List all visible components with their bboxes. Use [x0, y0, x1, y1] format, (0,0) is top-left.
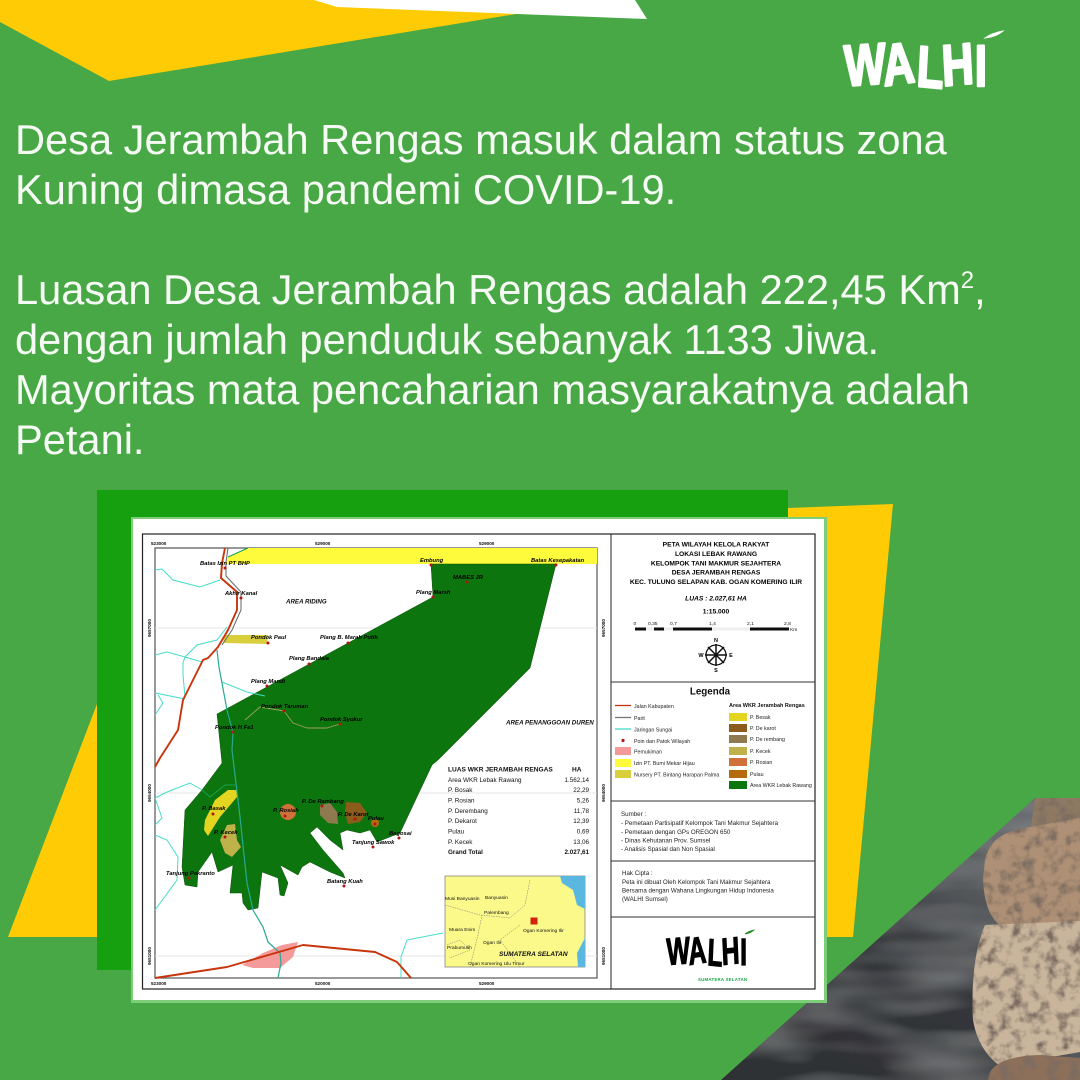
coordinate tick labels: 9654000: [147, 784, 152, 802]
area table: Pulau: [448, 828, 465, 836]
legend: Legenda: [690, 686, 731, 698]
area table: Grand Total: [448, 849, 483, 856]
map place labels: Bagosai: [389, 831, 412, 837]
legend: Jalan Kabupaten: [634, 704, 674, 710]
area table: P. Kecek: [448, 839, 473, 846]
heading text block: Luasan Desa Jerambah Rengas adalah 222,45 Km: [15, 266, 961, 313]
area table: P. Rosian: [448, 798, 475, 804]
map place labels: Pondok H Fe1: [215, 725, 254, 731]
top white banner shape: [314, 0, 647, 19]
heading text block: Kuning dimasa pandemi COVID-19.: [15, 166, 676, 213]
legend: Nursery PT. Bintang Harapan Palma: [634, 772, 719, 778]
heading text block: Mayoritas mata pencaharian masyarakatnya adalah: [15, 366, 970, 413]
coordinate tick labels: 523000: [151, 981, 167, 986]
area table: P. Derembang: [448, 808, 488, 815]
legend: Area WKR Jerambah Rengas: [729, 703, 805, 709]
area table: P. Dekarot: [448, 818, 477, 825]
heading text block: Petani.: [15, 416, 144, 463]
coordinate tick labels: 523000: [151, 541, 167, 546]
map place labels: Tanjung Sawok: [352, 840, 395, 846]
map title block: [630, 542, 802, 616]
rivers: [155, 548, 443, 978]
yellow concession strip: [226, 548, 597, 564]
WALHI logo: WALHI: [842, 31, 987, 101]
map place labels: Pondok Taruman: [261, 704, 309, 710]
legend: P. Kecek: [750, 749, 771, 755]
dark green backing panel: [97, 490, 788, 970]
map frame: [142, 534, 815, 989]
map title block: DESA JERAMBAH RENGAS: [672, 570, 761, 576]
compass rose: [698, 638, 733, 674]
coordinate tick labels: 9651000: [147, 947, 152, 965]
scale bar: 2,1: [747, 621, 754, 627]
map place labels: P. Rosiah: [273, 808, 299, 814]
map title block: KELOMPOK TANI MAKMUR SEJAHTERA: [651, 560, 781, 568]
map place labels: Pondok Syukur: [320, 717, 363, 723]
copyright text: Peta ini dibuat Oleh Kelompok Tani Makmur Sejahtera: [622, 879, 771, 886]
coordinate tick labels: [147, 541, 606, 986]
map place labels: P. Kecek: [214, 830, 238, 836]
scale bar: [634, 621, 797, 633]
coordinate tick labels: 9657000: [601, 619, 606, 637]
sources text: - Dinas Kehutanan Prov. Sumsel: [621, 838, 710, 844]
map place labels: Pulau: [368, 816, 384, 822]
map place labels: Embung: [420, 558, 444, 564]
heading text block: dengan jumlah penduduk sebanyak 1133 Jiwa.: [15, 316, 879, 363]
coordinate tick labels: 9654000: [601, 784, 606, 802]
legend: Area WKR Lebak Rawang: [750, 783, 812, 789]
scale bar: 2,8: [784, 621, 791, 627]
map title block: KEC. TULUNG SELAPAN KAB. OGAN KOMERING ILIR: [630, 579, 802, 586]
map title block: LUAS : 2.027,61 HA: [685, 596, 747, 602]
map place labels: Batas Izin PT BHP: [200, 561, 250, 567]
sources text: Sumber :: [621, 811, 646, 818]
heading text block: Desa Jerambah Rengas masuk dalam status zona: [15, 116, 948, 163]
map place labels: Plang B. Marah Putih: [320, 635, 378, 641]
map place labels: Plang Marsh: [416, 590, 451, 596]
inset location map: Ogan Ilir: [483, 940, 502, 946]
coordinate tick labels: 529000: [479, 981, 495, 986]
map place labels: MABES JR: [453, 575, 484, 581]
copyright text: (WALHI Sumsel): [622, 896, 668, 903]
area table: 2.027,61: [564, 849, 589, 856]
map place labels: Tanjung Pakranto: [166, 871, 215, 877]
scale bar: 0,7: [670, 621, 677, 627]
legend: P. De rembang: [750, 737, 785, 743]
legend: Jaringan Sungai: [634, 728, 672, 734]
map place labels: P. De Karot: [338, 812, 370, 818]
map title block: LOKASI LEBAK RAWANG: [675, 551, 757, 558]
inset location map: Musi Banyuasin: [445, 896, 480, 902]
area table: LUAS WKR JERAMBAH RENGAS: [448, 766, 553, 774]
inset location map: Palembang: [484, 910, 509, 916]
area table: Area WKR Lebak Rawang: [448, 777, 522, 784]
settlement area: [242, 942, 298, 968]
legend: Parit: [634, 716, 645, 722]
map title block: 1:15.000: [703, 608, 729, 616]
area table: 11,78: [574, 808, 589, 815]
compass rose: N: [714, 638, 718, 644]
legend: Pemukiman: [634, 750, 662, 756]
legend: P. Besak: [750, 715, 771, 721]
heading text block: ,: [974, 266, 986, 313]
inset location map: [445, 876, 585, 967]
map place labels: Akhir Kanal: [224, 591, 258, 597]
coordinate tick labels: 9657000: [147, 619, 152, 637]
scale bar: 1,4: [709, 621, 716, 627]
map card: [131, 517, 827, 1003]
map place labels: AREA PENANGGOAN DUREN: [505, 720, 594, 726]
community managed area polygon: [182, 564, 556, 910]
copyright text: Bersama dengan Wahana Lingkungan Hidup Indonesia: [622, 888, 774, 894]
inset location map: Ogan Komering Ulu Timur: [468, 961, 525, 967]
sub-area patches: [204, 790, 379, 857]
map place labels: Plang Mandi: [251, 679, 286, 685]
roads and canal: [155, 548, 411, 978]
area table: 1.562,14: [564, 777, 589, 784]
legend: P. Rosian: [750, 760, 772, 766]
area table: 5,26: [577, 798, 589, 804]
heading text block: [15, 116, 986, 463]
area table: 22,29: [573, 787, 589, 794]
inset location map: Prabumulih: [447, 945, 472, 951]
map place points: [188, 564, 558, 888]
compass rose: W: [698, 653, 704, 659]
compass rose: E: [729, 653, 733, 659]
inset location map: Ogan Komering Ilir: [523, 928, 564, 934]
compass rose: S: [714, 668, 718, 674]
area table: 0,69: [577, 828, 589, 836]
legend: Poin dan Patok Wilayah: [634, 739, 690, 745]
map place labels: P. Basak: [202, 806, 226, 812]
map place labels: AREA RIDING: [285, 598, 327, 606]
left yellow accent triangle: [8, 704, 97, 937]
map place labels: [166, 558, 594, 885]
scale bar: Km: [790, 627, 797, 633]
nursery patch: [223, 635, 268, 644]
coordinate tick labels: 520000: [315, 981, 331, 986]
copyright text: [622, 870, 774, 903]
right yellow accent panel: [788, 504, 893, 937]
scale bar: 0,35: [648, 621, 658, 627]
black WALHI logo: SUMATERA SELATAN: [698, 977, 747, 982]
inset location map: Banyuasin: [485, 895, 508, 901]
sources text: [621, 811, 779, 853]
legend: P. De karot: [750, 726, 776, 732]
map place labels: Pondok Paul: [251, 635, 286, 641]
sources text: - Analisis Spasial dan Non Spasial: [621, 846, 715, 853]
map place labels: P. De Rambang: [302, 799, 344, 805]
map place labels: Batang Kuah: [327, 879, 363, 885]
area table: 13,06: [573, 839, 589, 846]
sources text: - Pemetaan Partisipatif Kelompok Tani Makmur Sejahtera: [621, 820, 779, 827]
top yellow banner shape: [0, 0, 520, 81]
copyright text: Hak Cipta :: [622, 870, 653, 877]
photo: rubber slabs on dark water: [720, 798, 1080, 1080]
map grid: [155, 628, 597, 956]
coordinate tick labels: 529000: [479, 541, 495, 546]
area table: P. Bosak: [448, 787, 473, 794]
area table: [448, 766, 589, 856]
scale bar: 0: [634, 621, 636, 627]
black WALHI logo: WALHI: [665, 930, 747, 975]
coordinate tick labels: 529000: [315, 541, 331, 546]
inset location map: SUMATERA SELATAN: [499, 951, 568, 958]
heading text block: 2: [961, 267, 974, 294]
area table: 12,39: [573, 818, 589, 825]
map place labels: Plang Bandala: [289, 656, 330, 662]
legend: Izin PT. Bumi Mekar Hijau: [634, 761, 695, 767]
map place labels: Batas Kesepakatan: [531, 558, 585, 564]
legend: Pulau: [750, 772, 764, 778]
area table: HA: [572, 766, 582, 774]
coordinate tick labels: 9651000: [601, 947, 606, 965]
map title block: PETA WILAYAH KELOLA RAKYAT: [663, 542, 770, 548]
sources text: - Pemetaan dengan GPs OREGON 650: [621, 829, 731, 836]
legend: [615, 686, 812, 789]
inset location map: Muara Enim: [449, 927, 475, 933]
